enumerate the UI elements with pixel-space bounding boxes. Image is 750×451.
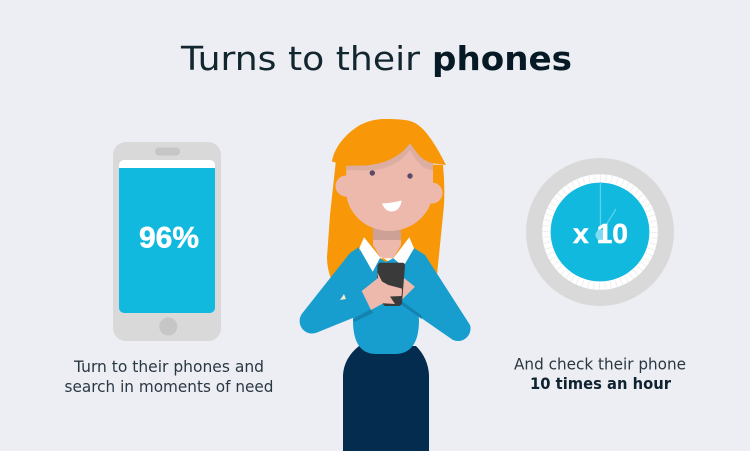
sleeve shadows: [353, 301, 422, 322]
phone caption: search in moments of need: [64, 377, 274, 396]
clock caption: 10 times an hour: [530, 374, 671, 393]
hair fringe: [332, 119, 446, 166]
left arm: [300, 247, 372, 333]
icon: clock x10: [526, 158, 674, 306]
sleeve speck: [340, 294, 346, 300]
mouth: [382, 200, 402, 212]
phone stat: 96%: [139, 222, 199, 254]
handset: [377, 263, 405, 306]
phone caption: Turn to their phones and: [73, 357, 264, 376]
sweater body: [353, 247, 419, 354]
forehead shadow: [347, 141, 433, 170]
left hand: [362, 272, 402, 310]
collar: [359, 237, 414, 272]
neck: [373, 228, 401, 258]
icon: smartphone with 96%: [113, 142, 221, 341]
right arm: [401, 248, 471, 341]
character: woman holding phone: [300, 119, 471, 451]
right hand: [395, 278, 415, 300]
title: phones: [432, 39, 572, 78]
hair back: [327, 160, 444, 279]
clock caption: And check their phone: [514, 354, 686, 374]
face: [346, 141, 433, 231]
clock stat: x 10: [573, 218, 628, 249]
ears: [336, 176, 356, 196]
skirt: [343, 346, 429, 451]
eyes: [370, 170, 375, 176]
title: Turns to their: [180, 39, 420, 78]
